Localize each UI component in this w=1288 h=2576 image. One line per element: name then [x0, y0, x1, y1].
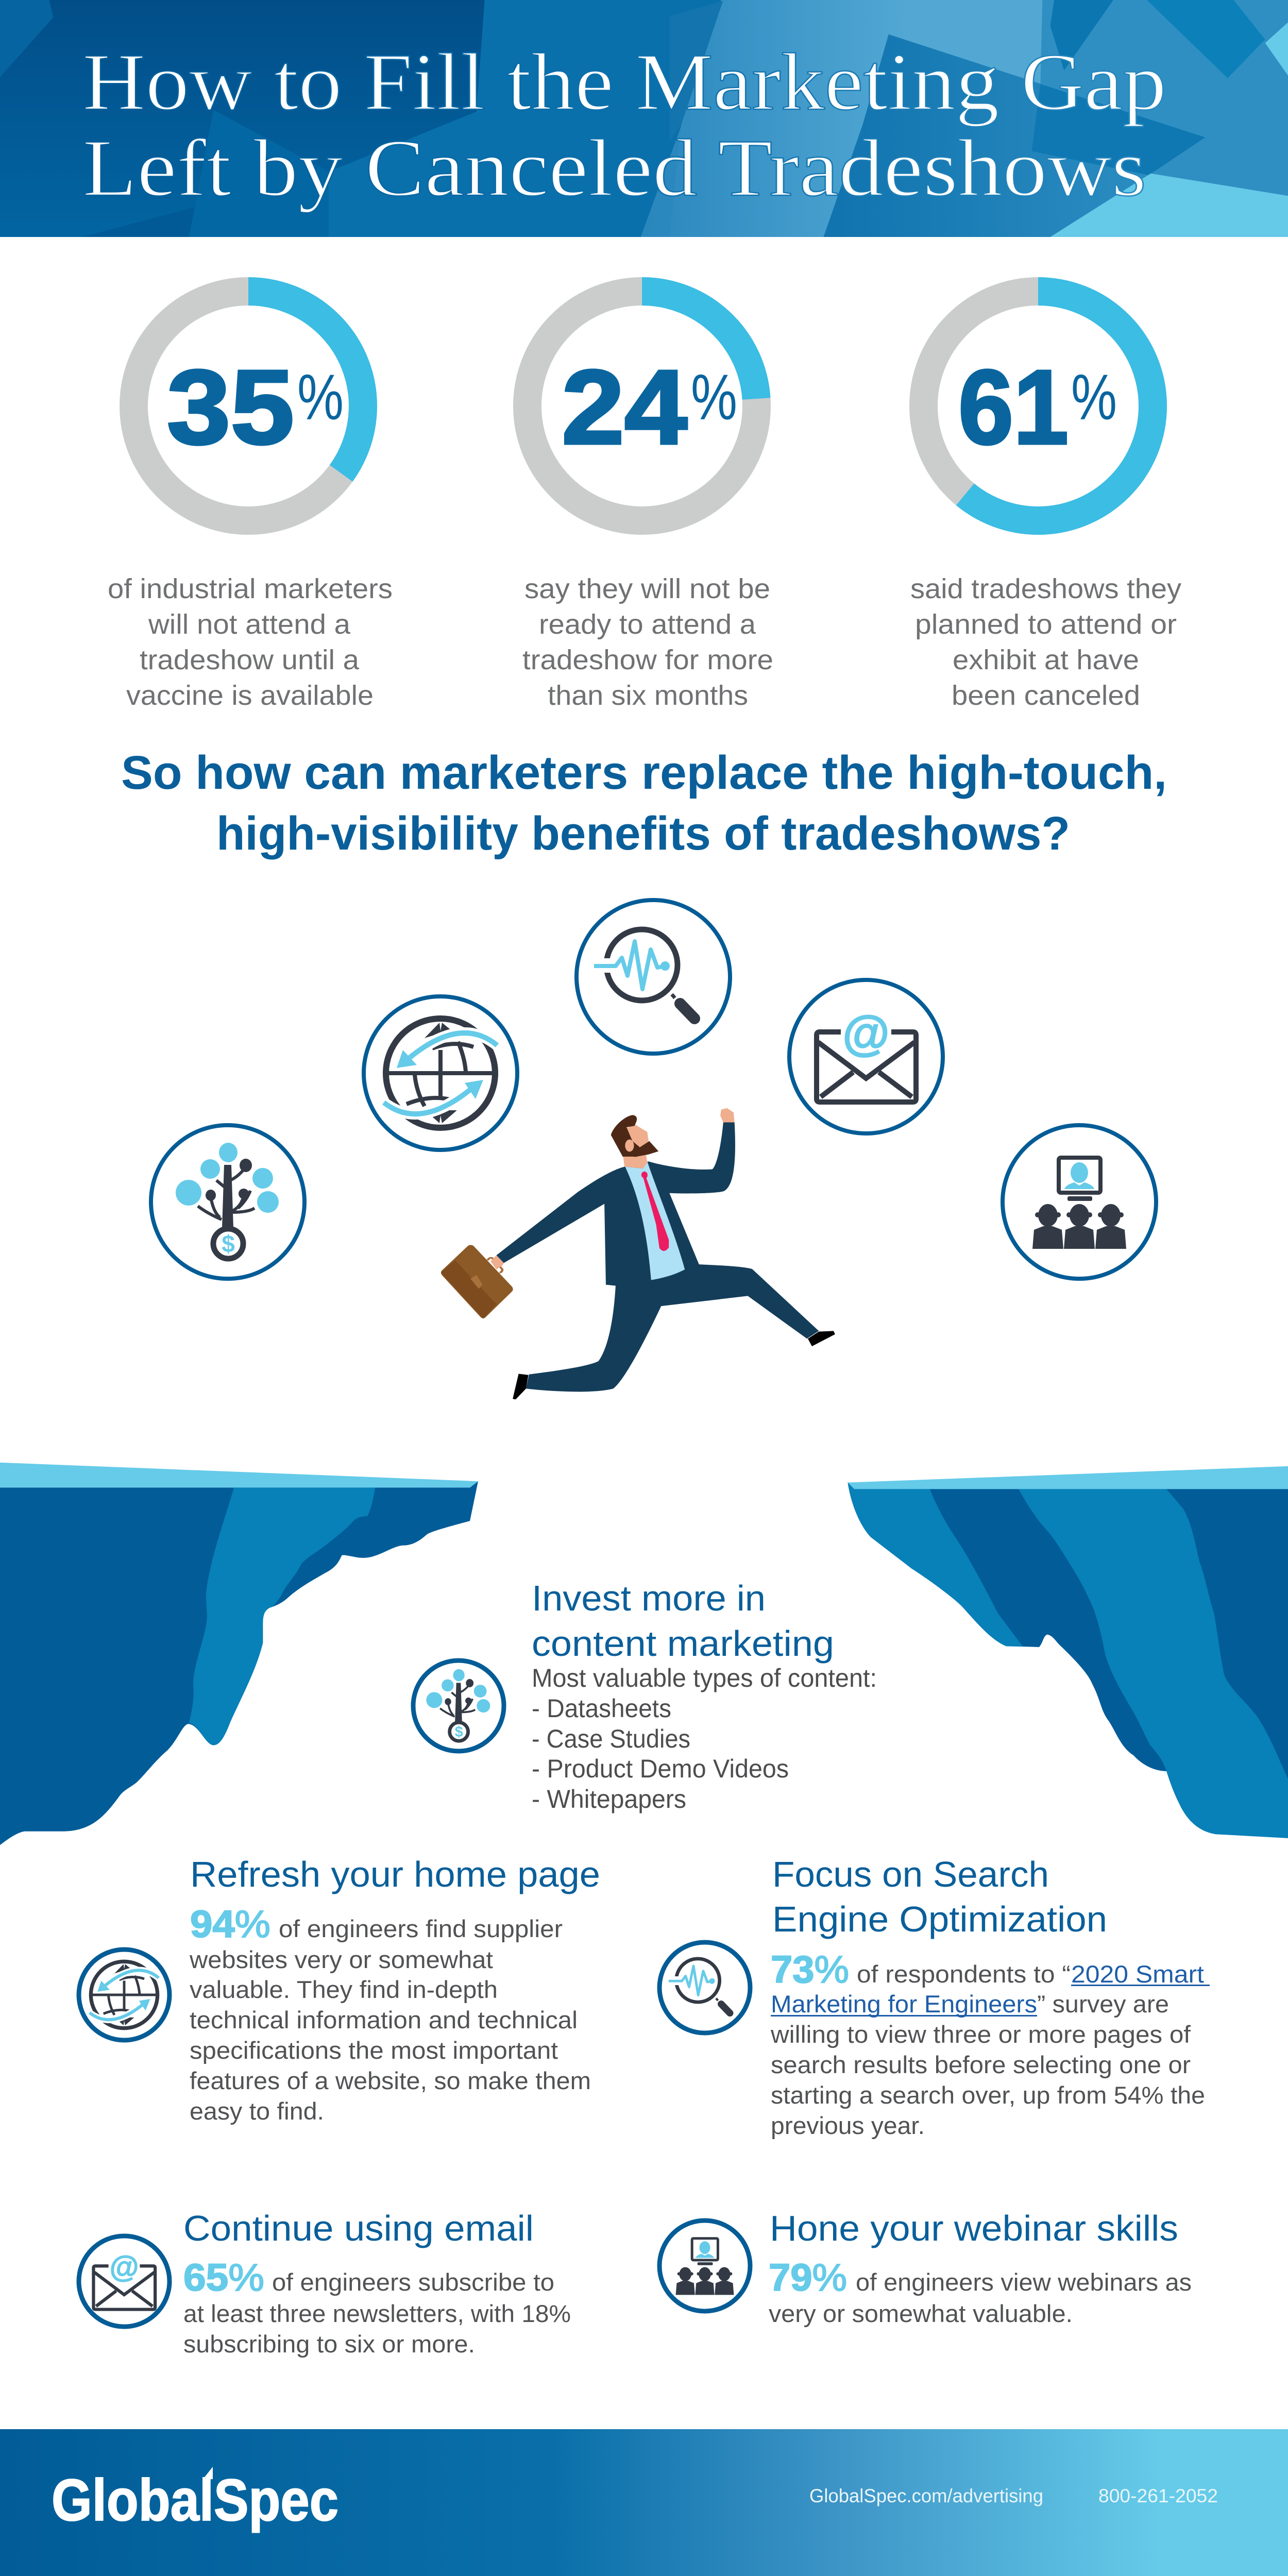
body: refresh: websites very or somewhat	[189, 1946, 493, 1973]
body: email: of engineers subscribe to	[272, 2268, 554, 2296]
stat text 24: tradeshow for more	[522, 645, 773, 675]
question heading: So how can marketers replace the high-touch,	[121, 747, 1167, 799]
illustration: right cliff	[848, 1466, 1288, 1838]
title: Left by Canceled Tradeshows	[82, 123, 1146, 213]
body: seo: starting a search over, up from 54% the	[771, 2081, 1205, 2109]
stat text 35: tradeshow until a	[140, 645, 360, 675]
list of content types: - Datasheets	[532, 1694, 671, 1723]
raised fist	[720, 1108, 735, 1123]
body: refresh: easy to find.	[190, 2097, 324, 2125]
briefcase	[441, 1245, 513, 1319]
section: invest in content marketing	[413, 1578, 877, 1814]
illustration: left cliff	[0, 1463, 478, 1845]
body: seo: search results before selecting one or	[771, 2051, 1191, 2078]
body: webinar	[769, 2268, 1192, 2327]
body: seo: previous year.	[771, 2112, 925, 2139]
panel: header banner	[0, 0, 1288, 237]
panel: footer	[0, 2429, 1288, 2576]
icon: webinar audience	[1003, 1125, 1156, 1279]
section: search engine optimization	[659, 1854, 1210, 2139]
icon: small magnifying glass	[659, 1942, 750, 2033]
donut chart 24	[528, 292, 756, 520]
shirt	[625, 1161, 685, 1280]
stat 94 percent: 94%	[190, 1903, 270, 1945]
question heading	[121, 747, 1167, 860]
body: refresh: features of a website, so make them	[190, 2067, 591, 2094]
body: seo: ” survey are	[1037, 1990, 1169, 2018]
body: webinar: of engineers view webinars as	[856, 2268, 1192, 2296]
stat text 61: said tradeshows they	[910, 573, 1181, 604]
number 35: %	[297, 362, 344, 433]
body: refresh: specifications the most important	[190, 2037, 558, 2064]
stat 79 percent: 79%	[769, 2256, 847, 2299]
number 24: %	[691, 362, 737, 433]
heading: refresh: Refresh your home page	[190, 1854, 600, 1894]
illustration: leaping businessman	[441, 1108, 835, 1399]
header background facets	[0, 0, 1288, 237]
list of content types: - Product Demo Videos	[532, 1754, 789, 1783]
body: refresh: technical information and technical	[190, 2006, 578, 2033]
neck	[623, 1154, 647, 1168]
stat 73 percent: 73%	[771, 1948, 849, 1991]
body: seo: willing to view three or more pages of	[770, 2021, 1191, 2048]
list of content types: - Whitepapers	[532, 1785, 686, 1814]
icon: globe	[364, 996, 517, 1150]
number 35	[167, 348, 344, 466]
body: seo	[770, 1960, 1210, 2139]
donut chart 35	[134, 292, 363, 520]
stat 65 percent: 65%	[183, 2256, 264, 2299]
panel: stat 61 percent	[910, 292, 1181, 711]
stat text 35	[108, 573, 393, 711]
body: refresh	[189, 1915, 591, 2125]
stat text 35: vaccine is available	[126, 680, 374, 711]
section: refresh home page	[79, 1854, 600, 2125]
stat text 35: will not attend a	[148, 609, 351, 640]
list of content types: - Case Studies	[532, 1724, 690, 1753]
title: How to Fill the Marketing Gap	[82, 37, 1166, 127]
heading: webinar: Hone your webinar skills	[770, 2208, 1178, 2248]
head	[611, 1115, 658, 1157]
number 35: 35	[167, 348, 294, 466]
body: seo: Marketing for Engineers	[771, 1990, 1037, 2018]
body: email: at least three newsletters, with 18%	[183, 2300, 571, 2327]
phone number: 800-261-2052	[1098, 2485, 1218, 2506]
section: hone webinar skills	[659, 2208, 1192, 2327]
heading: seo: Focus on Search	[772, 1854, 1049, 1894]
body: refresh: of engineers find supplier	[279, 1915, 563, 1942]
website: GlobalSpec.com/advertising	[809, 2485, 1043, 2506]
heading: invest more: content marketing	[532, 1623, 834, 1664]
heading: seo: Engine Optimization	[772, 1899, 1107, 1939]
stat text 61	[910, 573, 1181, 711]
body: refresh: valuable. They find in-depth	[190, 1976, 498, 2003]
heading: email: Continue using email	[183, 2208, 534, 2248]
number 61: 61	[958, 348, 1069, 466]
list of content types	[532, 1664, 877, 1814]
body: seo: 2020 Smart	[1071, 1960, 1204, 1988]
back shoe	[808, 1331, 835, 1346]
front shoe	[513, 1374, 529, 1399]
icon: small email	[79, 2236, 170, 2327]
panel: stat 24 percent	[522, 292, 773, 711]
body: email: subscribing to six or more.	[183, 2330, 475, 2358]
number 24: 24	[562, 348, 687, 466]
stat text 61: been canceled	[952, 680, 1140, 711]
heading: seo	[772, 1854, 1107, 1939]
title	[82, 37, 1166, 213]
hand	[490, 1255, 504, 1269]
tie	[641, 1172, 669, 1251]
icon: small growth tree	[413, 1660, 504, 1751]
stat text 61: exhibit at have	[953, 645, 1139, 675]
question heading: high-visibility benefits of tradeshows?	[216, 807, 1070, 860]
list of content types: Most valuable types of content:	[532, 1664, 877, 1692]
number 61: %	[1071, 362, 1117, 433]
stat text 24: ready to attend a	[539, 609, 756, 640]
logo: GlobalSpec: GlobalSpec	[52, 2468, 338, 2533]
icon: small globe	[79, 1950, 170, 2040]
number 24	[562, 348, 737, 466]
icon: magnifying glass	[577, 900, 730, 1054]
heading: invest more	[532, 1578, 834, 1664]
body: email	[183, 2268, 571, 2358]
section: continue using email	[79, 2208, 571, 2358]
stat text 24: than six months	[548, 680, 748, 711]
heading: invest more: Invest more in	[532, 1578, 766, 1618]
panel: stat 35 percent	[108, 292, 393, 711]
icon: growth tree	[151, 1125, 304, 1279]
icon: email	[789, 980, 943, 1133]
body: seo: of respondents to “	[857, 1960, 1071, 1988]
donut chart 61	[923, 292, 1153, 520]
stat text 35: of industrial marketers	[108, 573, 393, 604]
body: webinar: very or somewhat valuable.	[769, 2300, 1073, 2327]
footer background	[0, 2429, 1288, 2576]
stat text 24: say they will not be	[524, 573, 770, 604]
icon: small webinar audience	[659, 2221, 750, 2311]
stat text 61: planned to attend or	[915, 609, 1177, 640]
suit	[497, 1123, 819, 1392]
stat text 24	[522, 573, 773, 711]
